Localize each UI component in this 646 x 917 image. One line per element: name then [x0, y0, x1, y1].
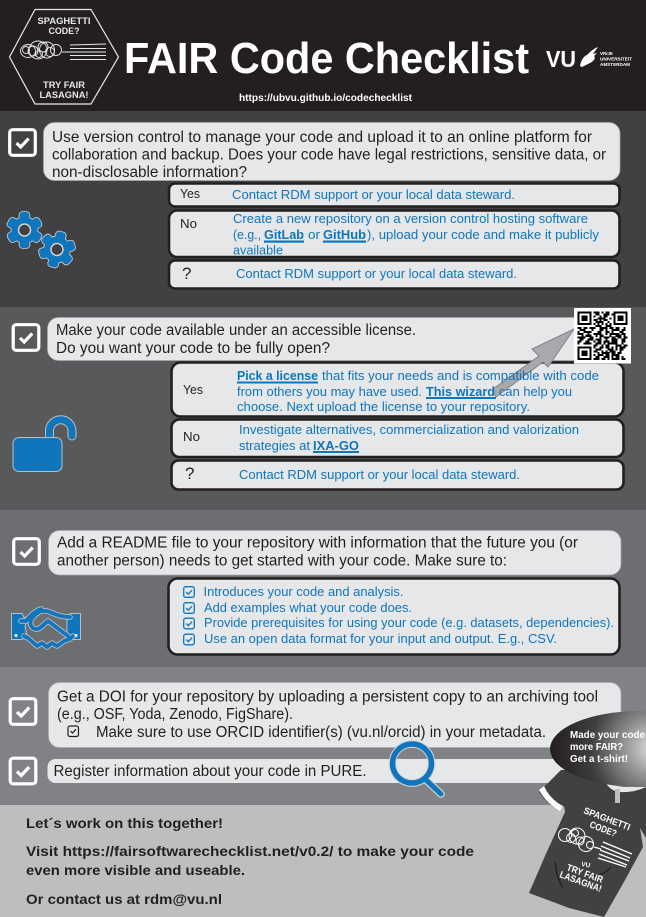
footer text	[26, 815, 474, 907]
panel: version control	[6, 122, 620, 288]
answer: no: GitHub	[323, 227, 366, 242]
question bubble 4	[48, 682, 621, 748]
t-shirt illustration: SPAGHETTI	[582, 806, 632, 833]
hexagon logo: spaghetti code, try FAIR lasagna	[10, 10, 118, 104]
question bubble 4: Make sure to use ORCID identifier(s) (vu.nl/orcid) in your metadata.	[96, 724, 546, 741]
answer: no: (e.g.,	[233, 227, 261, 242]
answer text: unknown	[185, 464, 520, 483]
answer text: yes: can help you	[499, 384, 572, 399]
answer text: yes: This wizard	[426, 384, 495, 399]
question bubble 1	[44, 122, 620, 181]
answer box: yes	[172, 362, 624, 416]
footer text: Or contact us at rdm@vu.nl	[26, 891, 222, 907]
answer text: unknown: ?	[185, 464, 194, 483]
t-shirt illustration: TRY FAIR	[565, 862, 605, 886]
VU logo: VU	[546, 46, 576, 72]
answer text: unknown: Contact RDM support or your local data steward.	[239, 467, 520, 482]
answer: no: GitLab	[264, 227, 304, 242]
answer box: unknown	[172, 460, 624, 490]
question bubble 2: Do you want your code to be fully open?	[56, 340, 330, 357]
answer: yes: Yes	[180, 186, 200, 201]
hexagon logo: spaghetti code, try FAIR lasagna: CODE?	[48, 26, 80, 37]
answer text: no: Investigate alternatives, commercialization and valorization	[239, 422, 579, 437]
t-shirt illustration: VU	[581, 861, 591, 870]
answer: unknown: ?	[182, 264, 191, 283]
answer text: no: strategies at	[239, 438, 310, 453]
icon: handshake	[12, 609, 80, 647]
question bubble 2: Make your code available under an accessible license.	[56, 322, 416, 339]
speech bubble: t-shirt offer: Made your code	[570, 730, 645, 741]
question bubble 3: another person) needs to get started with your code. Make sure to:	[57, 552, 507, 570]
t-shirt illustration: CODE?	[588, 820, 618, 840]
speech bubble: t-shirt offer: more FAIR?	[570, 742, 623, 753]
hexagon logo: spaghetti code, try FAIR lasagna: TRY FAIR	[43, 80, 85, 91]
answer text: yes	[183, 368, 599, 414]
footer text: Visit https://fairsoftwarechecklist.net/v0.2/ to make your code	[26, 843, 474, 859]
panel: license	[13, 308, 631, 490]
icon: open padlock	[13, 420, 72, 472]
checkbox 2	[13, 325, 39, 350]
t-shirt illustration	[529, 770, 646, 917]
answer text: no	[183, 422, 579, 453]
section 2 background	[0, 307, 646, 510]
arrow to QR code	[493, 329, 574, 397]
VU logo: UNIVERSITEIT	[600, 56, 632, 62]
question bubble 4: (e.g., OSF, Yoda, Zenodo, FigShare).	[57, 706, 293, 723]
section 3 background	[0, 510, 646, 667]
readme checklist box: Provide prerequisites for using your code (e.g. datasets, dependencies).	[204, 615, 614, 630]
footer text: Let´s work on this together!	[26, 815, 223, 831]
readme checklist box: Add examples what your code does.	[204, 600, 412, 615]
question bubble 5: Register information about your code in PURE.	[54, 763, 366, 780]
answer text: yes: from others you may have used.	[237, 384, 422, 399]
answer text: no: No	[183, 429, 200, 444]
question bubble 1: non-disclosable information?	[52, 164, 247, 181]
panel: readme	[12, 530, 621, 654]
answer: no: No	[180, 216, 197, 231]
header band	[0, 0, 646, 111]
hexagon logo: spaghetti code, try FAIR lasagna: LASAGNA!	[40, 90, 88, 101]
title: FAIR Code Checklist	[124, 34, 529, 83]
speech bubble: t-shirt offer: Get a t-shirt!	[570, 754, 628, 765]
icon: magnifying glass	[392, 744, 441, 794]
speech bubble: t-shirt offer	[550, 711, 646, 787]
question bubble 1: collaboration and backup. Does your code have legal restrictions, sensitive data, or	[52, 146, 606, 164]
hexagon logo: spaghetti code, try FAIR lasagna: SPAGHETTI	[38, 16, 90, 27]
answer text: yes: Yes	[183, 382, 203, 397]
answer: yes: Contact RDM support or your local data steward.	[232, 187, 515, 202]
checkbox 3	[14, 539, 39, 564]
section 1 background	[0, 111, 646, 307]
panel: DOI and PURE	[10, 682, 621, 794]
answer: no: available	[233, 242, 283, 258]
website url: https://ubvu.github.io/codechecklist	[239, 93, 413, 104]
question bubble 5	[48, 759, 620, 783]
answer: no: ), upload your code and make it publicly	[367, 227, 600, 242]
readme checklist box: Introduces your code and analysis.	[204, 584, 404, 599]
footer text: even more visible and useable.	[26, 862, 245, 878]
section 4 background	[0, 667, 646, 805]
answer text: yes: that fits your needs and is compatible with code	[322, 368, 599, 383]
answer: no	[169, 210, 620, 258]
readme checklist box: Use an open data format for your input and output. E.g., CSV.	[204, 631, 557, 646]
checkbox 5	[10, 758, 36, 784]
answer: yes	[169, 184, 620, 206]
answer: unknown	[169, 260, 620, 288]
checkbox 1	[10, 130, 35, 155]
checkbox 4	[10, 699, 36, 724]
icon: gears	[6, 212, 79, 272]
footer background	[0, 805, 646, 917]
question bubble 3	[48, 530, 621, 575]
answer text: no: IXA-GO	[313, 438, 359, 453]
QR code	[574, 308, 631, 364]
VU logo: AMSTERDAM	[600, 62, 630, 67]
VU logo: VRIJE	[600, 51, 613, 56]
question bubble 3: Add a README file to your repository with information that the future you (or	[57, 534, 578, 552]
answer text: yes: choose. Next upload the license to your repository.	[237, 399, 530, 414]
question bubble 4: Get a DOI for your repository by uploading a persistent copy to an archiving tool	[57, 688, 598, 706]
answer box: no	[172, 420, 624, 457]
answer text: yes: Pick a license	[237, 368, 318, 383]
question bubble 2	[48, 318, 620, 360]
answer: no: or	[308, 227, 321, 242]
t-shirt illustration: LASAGNA!	[558, 869, 603, 895]
answer: unknown: Contact RDM support or your local data steward.	[236, 266, 517, 281]
question bubble 1: Use version control to manage your code and upload it to an online platform for	[52, 129, 592, 146]
answer: no: Create a new repository on a version control hosting software	[233, 211, 588, 226]
VU logo	[546, 46, 632, 72]
readme checklist box	[168, 578, 620, 654]
